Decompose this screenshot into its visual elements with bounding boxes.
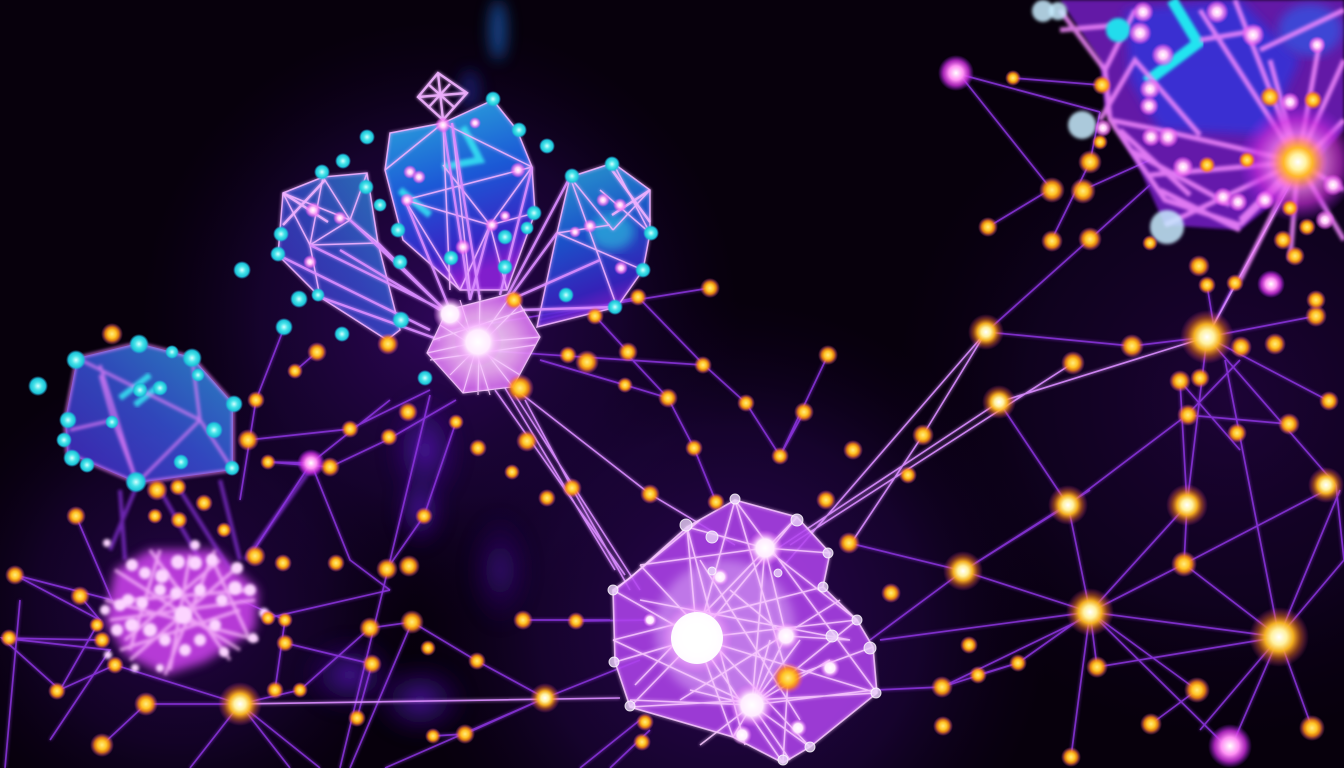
crystal cluster: top centre — [278, 73, 650, 340]
beams converging on ball — [278, 123, 617, 340]
crystal: right blue body — [537, 163, 650, 327]
bright white core — [661, 602, 733, 674]
dim purple haze — [300, 0, 535, 740]
big purple crystal ball — [608, 494, 881, 765]
pink and white lights — [1094, 0, 1344, 230]
cyan nodes — [28, 91, 659, 493]
pink beads — [100, 539, 269, 672]
pale orbs — [1032, 0, 1184, 244]
soft link between left crystal and left ball — [110, 470, 310, 570]
bright beam lines — [240, 170, 1298, 704]
crystal cluster: left — [65, 343, 233, 483]
crystal vertex lights — [303, 117, 628, 275]
starburst — [1238, 102, 1344, 222]
warm lights — [1092, 86, 1323, 236]
magenta nodes — [297, 55, 1285, 768]
crystal cluster: top right — [1032, 0, 1344, 280]
crystal wireframe facets — [278, 73, 650, 340]
cyan orb — [1106, 18, 1130, 42]
glow patch — [590, 214, 634, 250]
large glowing nodes — [218, 310, 1344, 726]
vertex beads — [608, 494, 881, 765]
crystal: left body — [278, 173, 400, 340]
pink mass: left — [100, 539, 269, 675]
bright cyan shard — [400, 127, 480, 215]
pink crystal ball: top centre — [427, 290, 540, 402]
crystal: main blue body — [385, 100, 535, 290]
